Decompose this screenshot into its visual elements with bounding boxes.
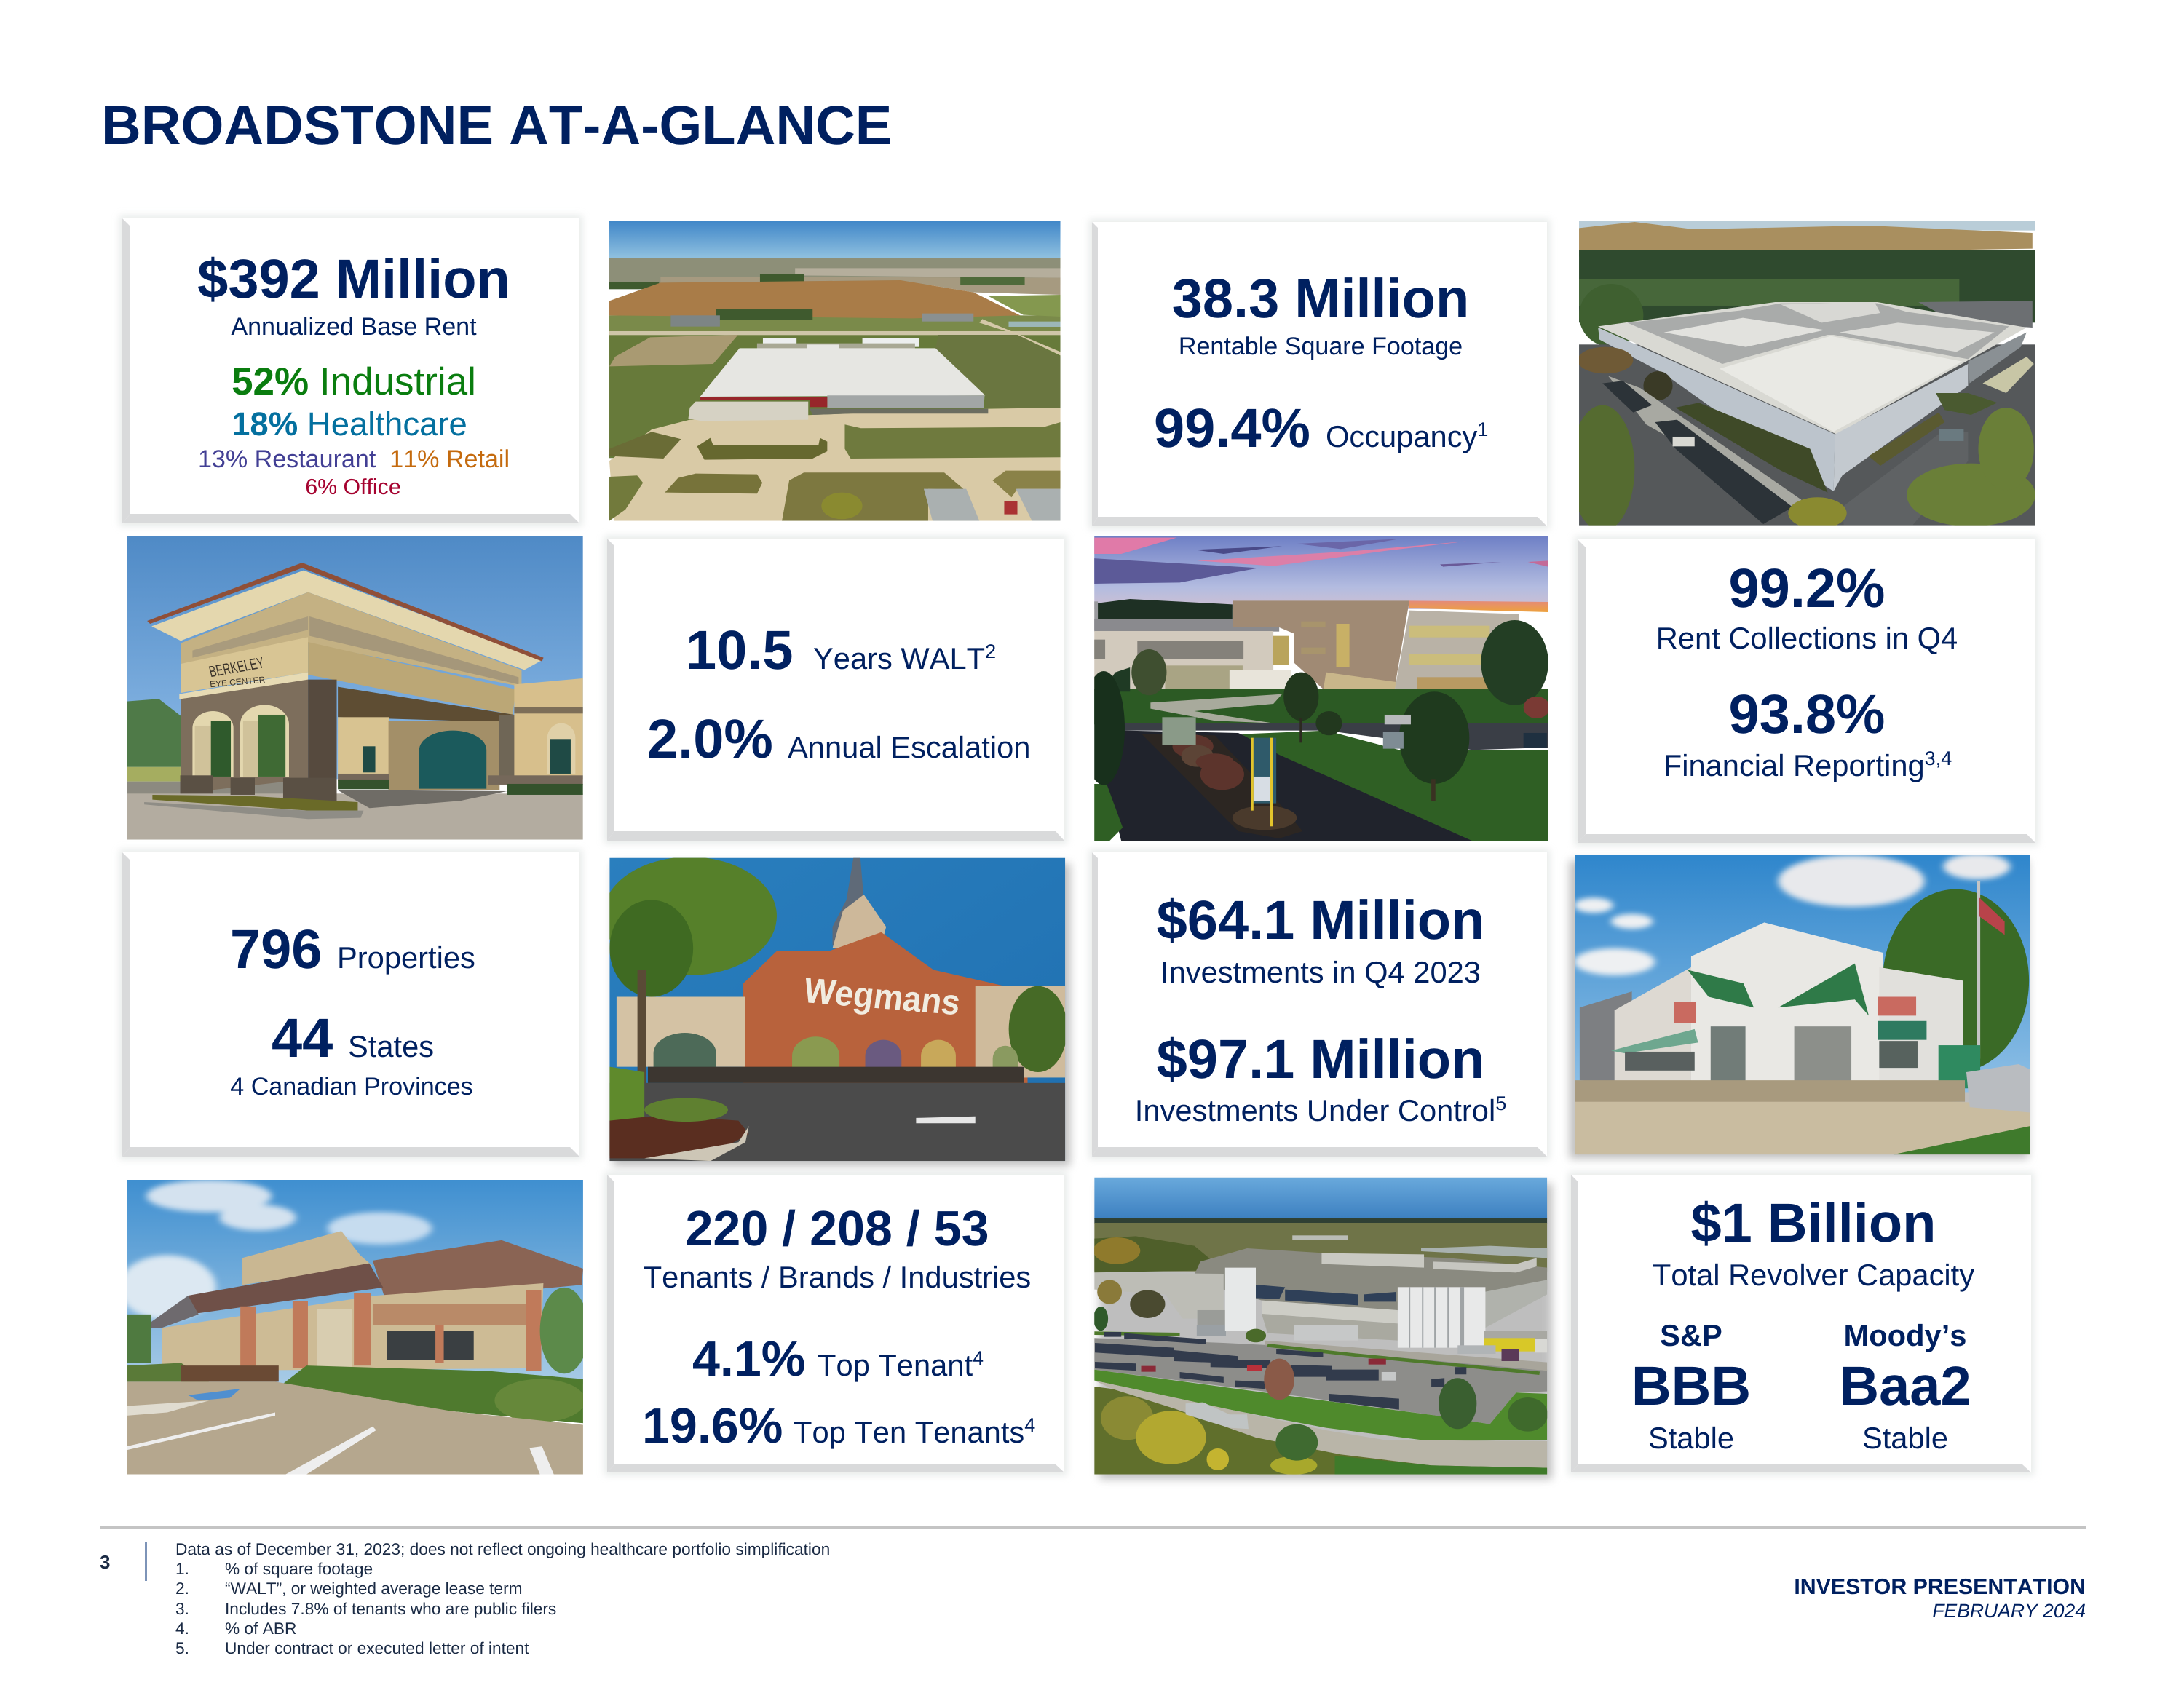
top ten label: 4 bbox=[1024, 1414, 1035, 1436]
photo: office campus aerial bbox=[1570, 221, 2035, 531]
occupancy label: Occupancy bbox=[1326, 419, 1477, 453]
top ten figure: 19.6% bbox=[642, 1398, 783, 1454]
sector: healthcare: 18% Healthcare bbox=[232, 405, 467, 443]
footnotes: 4. bbox=[175, 1619, 189, 1638]
collections label: Rent Collections in Q4 bbox=[1656, 621, 1958, 655]
footnotes: 5. bbox=[175, 1638, 189, 1657]
photo shadow bbox=[613, 863, 1070, 1166]
WALT figure: 10.5 bbox=[686, 619, 794, 681]
tenant counts label: Tenants / Brands / Industries bbox=[644, 1260, 1031, 1294]
title: BROADSTONE AT-A-GLANCE bbox=[101, 95, 892, 156]
Q4 investments figure: $64.1 Million bbox=[1157, 889, 1484, 951]
reporting label: Financial Reporting bbox=[1663, 748, 1925, 782]
occupancy figure: 99.4% bbox=[1154, 397, 1310, 459]
sector: office: 6% Office bbox=[305, 475, 401, 499]
panel: properties and states bbox=[119, 849, 582, 1159]
footnotes: 3. bbox=[175, 1599, 189, 1618]
revolver label: Total Revolver Capacity bbox=[1653, 1258, 1974, 1292]
panel: WALT and escalation bbox=[604, 536, 1067, 844]
rating: Moody's: Baa2 bbox=[1839, 1355, 1971, 1417]
reporting label: 3,4 bbox=[1925, 748, 1952, 769]
top ten label: Top Ten Tenants bbox=[794, 1415, 1024, 1449]
rent label: Annualized Base Rent bbox=[231, 313, 477, 341]
sectors: restaurant and retail: 13% Restaurant 11% Retail bbox=[198, 445, 510, 473]
photo: Berkeley Eye Center: EYE CENTER bbox=[209, 675, 266, 689]
photo: Krispy Kreme store bbox=[1574, 854, 2030, 1154]
photo shadow bbox=[1570, 860, 2028, 1159]
top tenant label: 4 bbox=[973, 1347, 984, 1369]
states label: States bbox=[348, 1029, 434, 1063]
footnotes: % of ABR bbox=[225, 1619, 296, 1638]
panel: revolver and credit ratings bbox=[1568, 1172, 2034, 1475]
top tenant figure: 4.1% bbox=[692, 1331, 805, 1387]
revolver figure: $1 Billion bbox=[1691, 1192, 1936, 1254]
escalation figure: 2.0% bbox=[647, 708, 773, 770]
WALT label: Years WALT bbox=[813, 641, 985, 675]
under control label: Investments Under Control bbox=[1135, 1093, 1495, 1127]
collections figure: 99.2% bbox=[1729, 558, 1885, 619]
panel: tenants and concentration bbox=[604, 1172, 1067, 1475]
square footage label: Rentable Square Footage bbox=[1179, 333, 1463, 360]
rating: Moody's: Stable bbox=[1862, 1421, 1948, 1455]
rating: S&P: Stable bbox=[1648, 1421, 1734, 1455]
panel: Q4 investments and under control bbox=[1089, 849, 1550, 1159]
Q4 investments label: Investments in Q4 2023 bbox=[1160, 955, 1481, 989]
states figure: 44 bbox=[272, 1007, 333, 1069]
photo: Berkeley Eye Center: BERKELEY bbox=[207, 654, 266, 681]
rating: S&P bbox=[1631, 1318, 1751, 1455]
rent headline: $392 Million bbox=[197, 248, 510, 310]
tenant counts: 220 / 208 / 53 bbox=[685, 1201, 989, 1256]
rating: S&P: S&P bbox=[1660, 1318, 1722, 1352]
photo: Wegmans store bbox=[603, 857, 1067, 1161]
photo: Berkeley Eye Center bbox=[127, 536, 583, 840]
square footage headline: 38.3 Million bbox=[1172, 268, 1469, 330]
rating: S&P: BBB bbox=[1631, 1355, 1751, 1417]
panel: collections and reporting bbox=[1575, 536, 2038, 846]
photo: Outback Steakhouse bbox=[119, 1180, 589, 1475]
under control label: 5 bbox=[1495, 1093, 1506, 1114]
properties label: Properties bbox=[337, 940, 475, 975]
photo: industrial plant aerial bbox=[1093, 1178, 1548, 1475]
photo: warehouse aerial bbox=[609, 221, 1061, 521]
panel: square footage and occupancy bbox=[1089, 219, 1550, 529]
rating: Moody's: Moody’s bbox=[1844, 1318, 1966, 1352]
page number: 3 bbox=[100, 1551, 110, 1573]
rating: Moody's bbox=[1839, 1318, 1971, 1455]
photo shadow bbox=[1099, 1184, 1552, 1479]
presentation date: FEBRUARY 2024 bbox=[1932, 1600, 2086, 1622]
occupancy label: 1 bbox=[1477, 419, 1488, 440]
reporting figure: 93.8% bbox=[1729, 683, 1885, 745]
footnotes: “WALT”, or weighted average lease term bbox=[225, 1579, 523, 1598]
footnotes: Under contract or executed letter of intent bbox=[225, 1638, 529, 1657]
footer rule bbox=[100, 1526, 2086, 1529]
footnotes bbox=[175, 1539, 830, 1657]
properties figure: 796 bbox=[230, 919, 322, 980]
top tenant label: Top Tenant bbox=[818, 1348, 973, 1382]
footer divider bbox=[145, 1542, 147, 1581]
provinces label: 4 Canadian Provinces bbox=[230, 1073, 473, 1101]
footnotes: Includes 7.8% of tenants who are public filers bbox=[225, 1599, 556, 1618]
presentation label: INVESTOR PRESENTATION bbox=[1794, 1575, 2086, 1599]
photo: Wegmans store: Wegmans bbox=[802, 970, 963, 1023]
footnotes: Data as of December 31, 2023; does not reflect ongoing healthcare portfolio simplification bbox=[175, 1539, 830, 1558]
WALT label: 2 bbox=[985, 641, 996, 662]
under control figure: $97.1 Million bbox=[1157, 1028, 1484, 1090]
footnotes: % of square footage bbox=[225, 1559, 373, 1578]
sector: industrial: 52% Industrial bbox=[232, 360, 476, 403]
panel: annualized base rent bbox=[119, 215, 582, 526]
escalation label: Annual Escalation bbox=[788, 730, 1030, 764]
footnotes: 2. bbox=[175, 1579, 189, 1598]
footnotes: 1. bbox=[175, 1559, 189, 1578]
photo: Ametek campus at dusk bbox=[1083, 536, 1550, 841]
